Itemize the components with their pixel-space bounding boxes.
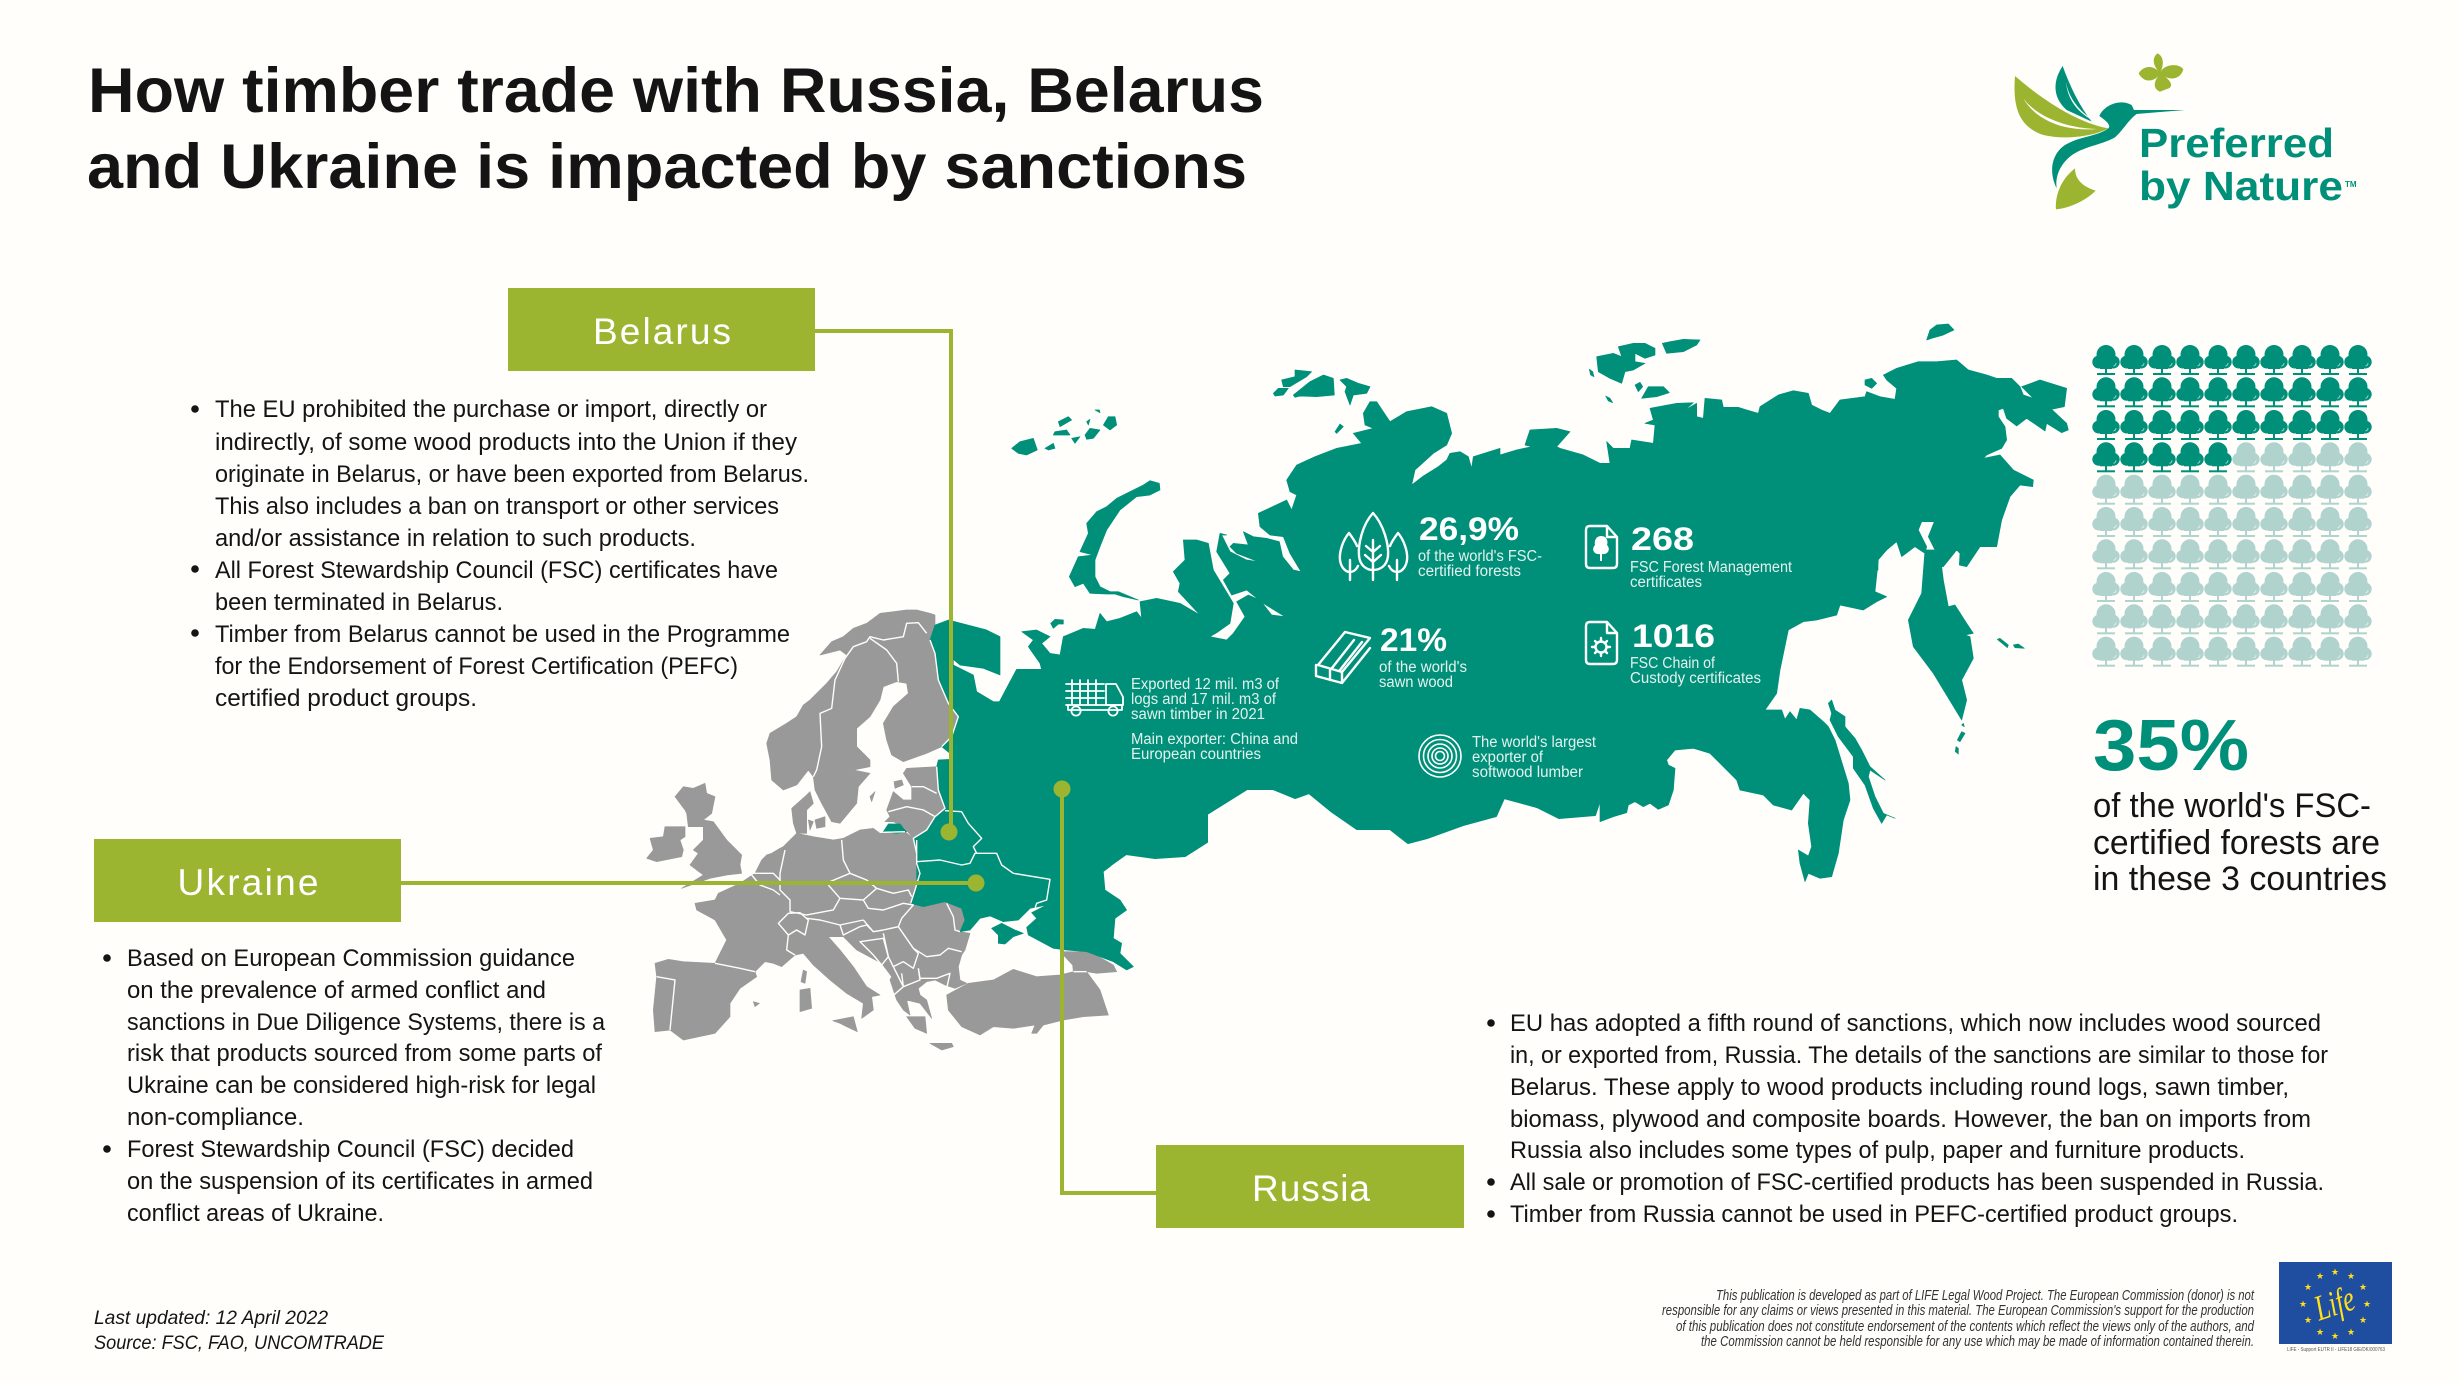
text block: Belarus: originate in Belarus, or have been exported from Belarus. xyxy=(215,461,809,488)
map: Europe north (grey) xyxy=(647,610,958,888)
text block: Belarus: been terminated in Belarus. xyxy=(215,589,503,616)
stat: 1016 FSC Chain of Custody certificates: 1016 xyxy=(1632,618,1715,654)
label: Ukraine xyxy=(94,839,401,922)
footer: disclaimer: the Commission cannot be held responsible for any use which may be made of information contained therein. xyxy=(1701,1334,2254,1350)
connector: Ukraine xyxy=(401,874,984,892)
icon: document with gear xyxy=(1586,622,1617,664)
label: Belarus xyxy=(508,288,815,371)
icon: planks xyxy=(1316,632,1370,683)
stat: 26,9% of forests: 26,9% xyxy=(1419,511,1519,547)
callout: 35% xyxy=(2093,706,2387,898)
text block: Ukraine: Based on European Commission guidance xyxy=(127,945,575,972)
map: Kolguev xyxy=(1051,619,1063,628)
text block: Ukraine: Ukraine can be considered high-risk for legal xyxy=(127,1072,596,1099)
map: central Russia (teal) xyxy=(1000,560,1733,869)
logo: EU LIFE: ★ xyxy=(2299,1299,2307,1309)
label: Russia: Russia xyxy=(1252,1168,1370,1209)
logo: EU LIFE xyxy=(2279,1262,2392,1353)
text block: Ukraine: risk that products sourced from some parts of xyxy=(127,1040,602,1067)
text block: Ukraine: Forest Stewardship Council (FSC) decided xyxy=(127,1136,574,1163)
map: New Siberian Islands xyxy=(1865,378,1877,388)
stat: softwood lumber: exporter of xyxy=(1472,749,1544,766)
map: southern borders xyxy=(657,840,1087,1030)
stat: 268 FSC Forest Management certificates xyxy=(1586,521,1793,591)
text block: Belarus: for the Endorsement of Forest Certification (PEFC) xyxy=(215,653,738,680)
logo: EU LIFE: ★ xyxy=(2316,1271,2324,1281)
stat: 26,9% of forests: certified forests xyxy=(1418,563,1521,580)
text block: Belarus xyxy=(191,396,809,712)
icon: document with tree xyxy=(1586,526,1617,568)
footer: disclaimer: of this publication does not constitute endorsement of the contents which reflect the views only of the authors, and xyxy=(1676,1319,2255,1335)
stat: 1016 FSC Chain of Custody certificates xyxy=(1586,618,1761,687)
text block: Belarus: This also includes a ban on transport or other services xyxy=(215,493,779,520)
text block: Russia: Belarus. These apply to wood products including round logs, sawn timber, xyxy=(1510,1074,2289,1101)
text block: Russia: Russia also includes some types of pulp, paper and furniture products. xyxy=(1510,1137,2245,1164)
map: Sakhalin xyxy=(1828,700,1895,823)
logo: EU LIFE: ★ xyxy=(2363,1299,2371,1309)
map: Siberia north coast and Chukotka (teal) xyxy=(1500,324,2068,653)
map: Kamchatka xyxy=(1908,550,1973,720)
label: Ukraine: Ukraine xyxy=(178,862,318,903)
stat: exports: Exported 12 mil. m3 of xyxy=(1131,676,1280,693)
map: Kuril and Commander Islands xyxy=(1955,638,2024,754)
map: Wrangel Island xyxy=(1927,324,1954,340)
map: Svalbard xyxy=(1012,410,1117,455)
icon: trees xyxy=(1340,513,1407,580)
icon: log rings xyxy=(1419,735,1461,777)
text block: Russia: EU has adopted a fifth round of sanctions, which now includes wood sourced xyxy=(1510,1010,2321,1037)
connector: Russia xyxy=(1054,780,1156,1193)
stat: 268 FSC Forest Management certificates: certificates xyxy=(1630,574,1702,591)
stat: exports xyxy=(1066,676,1298,763)
text block: Russia xyxy=(1487,1010,2328,1228)
text block: Russia: biomass, plywood and composite boards. However, the ban on imports from xyxy=(1510,1106,2311,1133)
icon: logging truck xyxy=(1066,680,1123,716)
stat: 268 FSC Forest Management certificates: 268 xyxy=(1631,521,1694,557)
logo: EU LIFE: ★ xyxy=(2304,1315,2312,1325)
footer: sources xyxy=(94,1308,384,1354)
footer: disclaimer: This publication is developed as part of LIFE Legal Wood Project. The European Commission (donor) is not xyxy=(1716,1288,2255,1304)
callout: 35%: in these 3 countries xyxy=(2093,860,2387,898)
text block: Ukraine: on the prevalence of armed conflict and xyxy=(127,977,546,1004)
stat: exports: Main exporter: China and xyxy=(1131,731,1298,748)
footer: disclaimer: responsible for any claims or views presented in this material. The European Commission's support for the production xyxy=(1662,1303,2254,1319)
text block: Ukraine: sanctions in Due Diligence Systems, there is a xyxy=(127,1009,606,1036)
footer: disclaimer xyxy=(1662,1288,2255,1350)
label: Russia xyxy=(1156,1145,1464,1228)
stat: exports: logs and 17 mil. m3 of xyxy=(1131,691,1277,708)
stat: exports: sawn timber in 2021 xyxy=(1131,706,1265,723)
text block: Ukraine: non-compliance. xyxy=(127,1104,304,1131)
map: Russian Far East (teal) xyxy=(1600,550,2024,882)
map: Russia Arctic coast and Barents (teal) xyxy=(1012,370,1500,670)
stat: exports: European countries xyxy=(1131,746,1261,763)
chart: tree pictogram 35 of 100 xyxy=(2092,345,2372,667)
stat: softwood lumber: The world's largest xyxy=(1472,734,1597,751)
stat: softwood lumber xyxy=(1419,734,1597,781)
text block: Belarus: certified product groups. xyxy=(215,685,477,712)
map: Ukraine and south-west Russia (teal) xyxy=(911,840,1140,970)
footer: sources: Last updated: 12 April 2022 xyxy=(94,1308,328,1329)
stat: 1016 FSC Chain of Custody certificates: Custody certificates xyxy=(1630,670,1761,687)
logo: Preferred by Nature: Preferred xyxy=(2139,120,2334,166)
title: How timber trade with Russia, Belarus xyxy=(88,56,1264,126)
map: northern borders xyxy=(813,623,982,853)
stat: 26,9% of forests xyxy=(1340,511,1542,580)
callout: 35%: certified forests are xyxy=(2093,824,2380,862)
stat: 21% sawn wood: sawn wood xyxy=(1379,674,1453,691)
text block: Russia: All sale or promotion of FSC-certified products has been suspended in Russia. xyxy=(1510,1169,2324,1196)
connector: Belarus xyxy=(815,331,958,840)
title: and Ukraine is impacted by sanctions xyxy=(87,132,1247,202)
map: Franz Josef Land xyxy=(1273,370,1370,433)
map: Belarus and north-west Russia (teal) xyxy=(883,620,1000,880)
stat: 268 FSC Forest Management certificates: FSC Forest Management xyxy=(1630,559,1793,576)
stat: softwood lumber: softwood lumber xyxy=(1472,764,1583,781)
stat: 21% sawn wood: 21% xyxy=(1380,622,1447,658)
callout: 35%: of the world's FSC- xyxy=(2093,787,2371,825)
logo: Preferred by Nature: by Nature xyxy=(2139,163,2343,209)
text block: Russia: in, or exported from, Russia. The details of the sanctions are similar to those for xyxy=(1510,1042,2328,1069)
text block: Belarus: The EU prohibited the purchase or import, directly or xyxy=(215,396,767,423)
map: Severnaya Zemlya xyxy=(1589,339,1700,403)
map: Novaya Zemlya xyxy=(1069,481,1160,600)
stat: 1016 FSC Chain of Custody certificates: FSC Chain of xyxy=(1630,655,1716,672)
text block: Belarus: indirectly, of some wood products into the Union if they xyxy=(215,429,797,456)
text block: Ukraine: on the suspension of its certificates in armed xyxy=(127,1168,593,1195)
logo: EU LIFE: ★ xyxy=(2347,1327,2355,1337)
logo: Preferred by Nature xyxy=(2015,53,2357,209)
title xyxy=(87,56,1264,202)
logo: EU LIFE: LIFE - Support EUTR II - LIFE18 GIE/DK/000763 xyxy=(2287,1347,2385,1353)
logo: EU LIFE: ★ xyxy=(2359,1315,2367,1325)
logo: EU LIFE: Life xyxy=(2309,1278,2360,1329)
text block: Belarus: All Forest Stewardship Council (FSC) certificates have xyxy=(215,557,778,584)
callout: 35%: 35% xyxy=(2093,706,2249,786)
logo: Preferred by Nature: TM xyxy=(2345,180,2357,189)
logo: EU LIFE: ★ xyxy=(2304,1282,2312,1292)
text block: Belarus: Timber from Belarus cannot be used in the Programme xyxy=(215,621,790,648)
map: Europe south (grey) xyxy=(653,828,1117,1050)
logo: EU LIFE: ★ xyxy=(2331,1331,2339,1341)
logo: EU LIFE: ★ xyxy=(2331,1267,2339,1277)
text block: Ukraine xyxy=(103,945,606,1227)
text block: Ukraine: conflict areas of Ukraine. xyxy=(127,1200,384,1227)
logo: EU LIFE: ★ xyxy=(2316,1327,2324,1337)
label: Belarus: Belarus xyxy=(593,311,731,352)
stat: 21% sawn wood: of the world's xyxy=(1379,659,1467,676)
stat: 21% sawn wood xyxy=(1316,622,1467,691)
stat: 26,9% of forests: of the world's FSC- xyxy=(1418,548,1542,565)
logo: EU LIFE: ★ xyxy=(2359,1282,2367,1292)
text block: Russia: Timber from Russia cannot be used in PEFC-certified product groups. xyxy=(1510,1201,2238,1228)
text block: Belarus: and/or assistance in relation to such products. xyxy=(215,525,696,552)
logo: EU LIFE: ★ xyxy=(2347,1271,2355,1281)
footer: sources: Source: FSC, FAO, UNCOMTRADE xyxy=(94,1333,384,1354)
